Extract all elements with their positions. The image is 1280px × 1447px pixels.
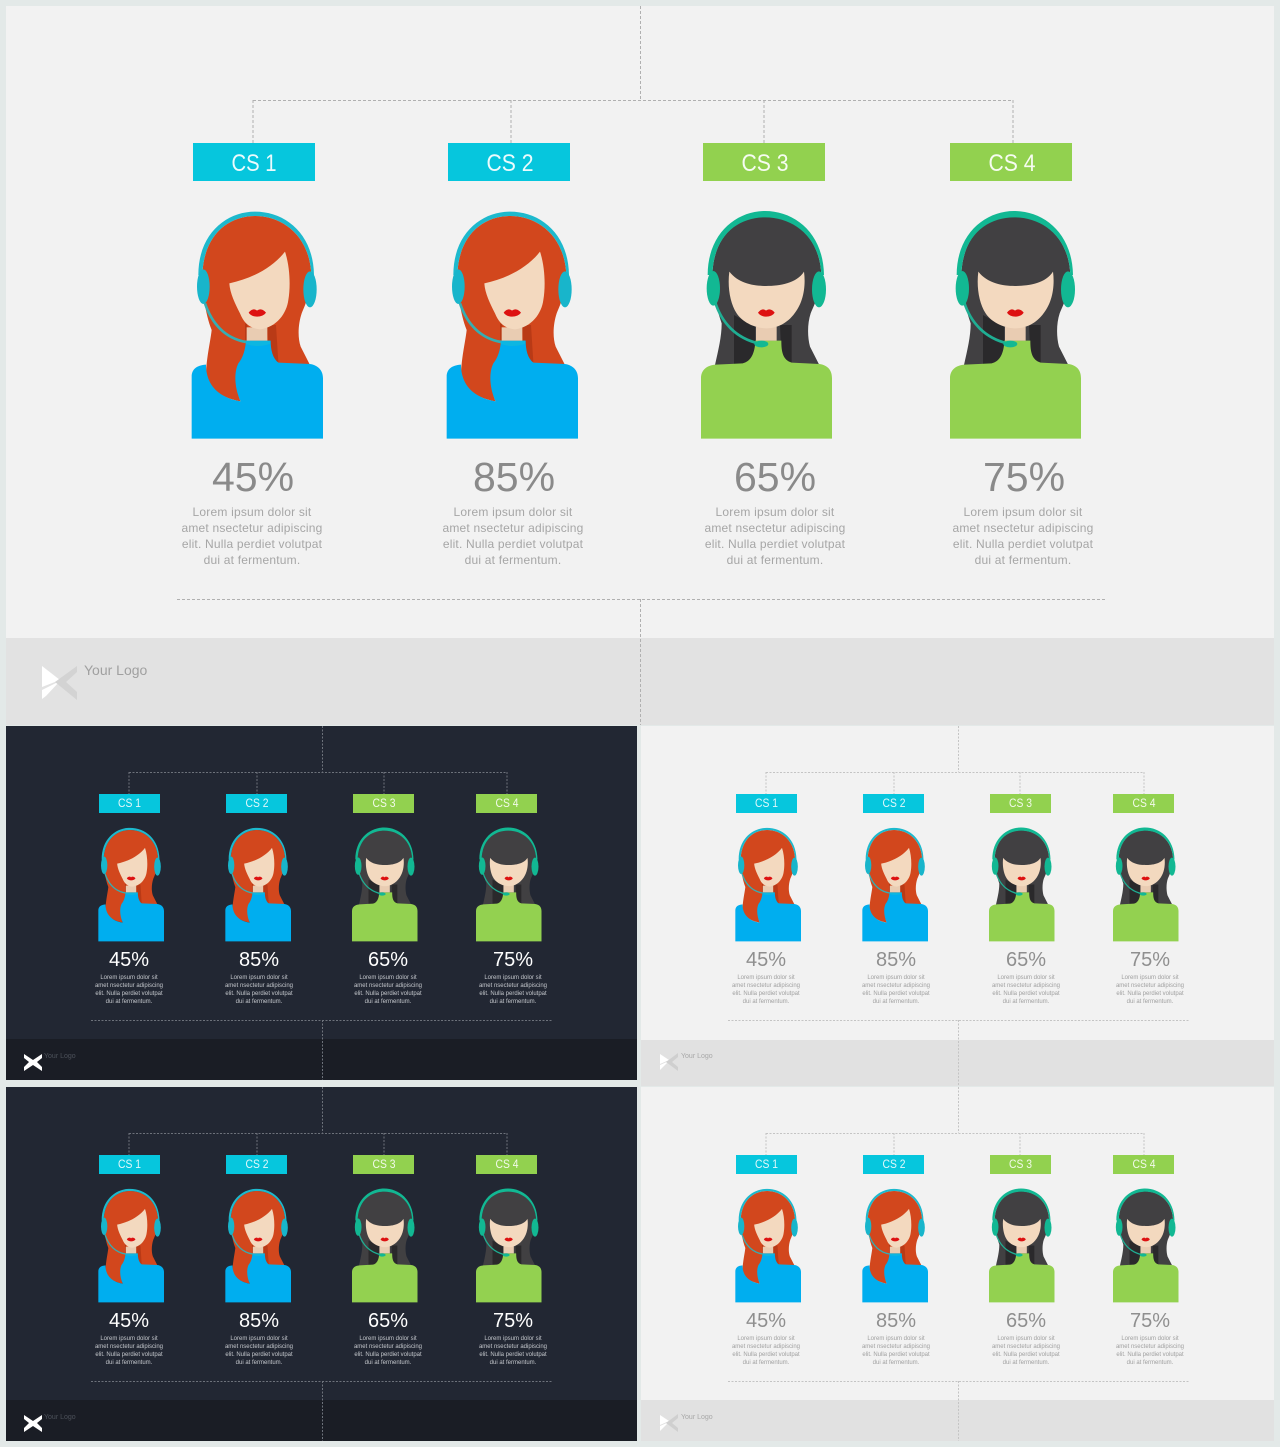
card: CS 4 [1113, 794, 1184, 1005]
card: CS 4: elit. Nulla perdiet volutpat [1116, 991, 1184, 997]
card: CS 2: amet nsectetur adipiscing [862, 1344, 930, 1350]
card: CS 2: 85% [876, 1310, 916, 1332]
card: CS 1: elit. Nulla perdiet volutpat [182, 537, 323, 551]
card: CS 2: dui at fermentum. [236, 1360, 283, 1366]
card: CS 1 [95, 1155, 164, 1366]
card: CS 2: CS 2 [882, 796, 906, 810]
card: CS 3: Lorem ipsum dolor sit [359, 975, 417, 981]
card: CS 1: amet nsectetur adipiscing [95, 983, 163, 989]
logo: Your Logo [44, 1414, 76, 1421]
card: CS 2: 85% [876, 949, 916, 971]
card: CS 1: amet nsectetur adipiscing [732, 1344, 800, 1350]
logo [24, 1414, 76, 1432]
card: CS 1: dui at fermentum. [106, 999, 153, 1005]
card: CS 2 [442, 143, 584, 567]
card: CS 1: elit. Nulla perdiet volutpat [732, 991, 800, 997]
card: CS 3: Lorem ipsum dolor sit [716, 505, 835, 519]
card: CS 4: amet nsectetur adipiscing [1116, 983, 1184, 989]
card: CS 4: amet nsectetur adipiscing [1116, 1344, 1184, 1350]
card: CS 2: amet nsectetur adipiscing [862, 983, 930, 989]
card: CS 3: Lorem ipsum dolor sit [997, 975, 1055, 981]
card: CS 4: dui at fermentum. [490, 1360, 537, 1366]
logo: your logo [42, 662, 148, 700]
card: CS 4: elit. Nulla perdiet volutpat [479, 991, 547, 997]
card: CS 2 [862, 1155, 930, 1366]
card: CS 1: Lorem ipsum dolor sit [193, 505, 312, 519]
card: CS 3: CS 3 [742, 150, 788, 177]
card: CS 3: dui at fermentum. [365, 1360, 412, 1366]
logo: your logo: Your Logo [84, 662, 148, 678]
card: CS 4: elit. Nulla perdiet volutpat [1116, 1352, 1184, 1358]
card: CS 3: elit. Nulla perdiet volutpat [705, 537, 846, 551]
card: CS 2: CS 2 [882, 1157, 906, 1171]
card: CS 1: elit. Nulla perdiet volutpat [95, 991, 163, 997]
logo [24, 1053, 76, 1071]
card: CS 1: amet nsectetur adipiscing [181, 521, 323, 535]
card: CS 2 [225, 1155, 293, 1366]
card: CS 3: elit. Nulla perdiet volutpat [354, 1352, 422, 1358]
card: CS 2: 85% [473, 454, 555, 500]
card: CS 4: CS 4 [1132, 796, 1156, 810]
card: CS 4: CS 4 [496, 1157, 519, 1171]
card: CS 4: CS 4 [1132, 1157, 1156, 1171]
card: CS 2: CS 2 [486, 150, 534, 177]
card: CS 2: 85% [239, 949, 279, 971]
card: CS 3: 65% [1006, 949, 1046, 971]
logo: Your Logo [681, 1053, 713, 1060]
card: CS 1 [732, 794, 801, 1005]
card: CS 3: amet nsectetur adipiscing [992, 983, 1060, 989]
card: CS 4: 75% [493, 949, 533, 971]
card: CS 4: Lorem ipsum dolor sit [964, 505, 1083, 519]
card: CS 3: 65% [368, 1310, 408, 1332]
card: CS 1: 45% [109, 1310, 149, 1332]
card: CS 2 [225, 794, 293, 1005]
card: CS 3: dui at fermentum. [1003, 999, 1050, 1005]
card: CS 4 [950, 143, 1094, 567]
card: CS 1 [181, 143, 323, 567]
card: CS 4: Lorem ipsum dolor sit [1121, 1336, 1179, 1342]
card: CS 2: Lorem ipsum dolor sit [867, 1336, 925, 1342]
logo [660, 1053, 713, 1071]
card: CS 4: CS 4 [988, 150, 1036, 177]
panel: dark thumbnail top [6, 726, 637, 1080]
card: CS 2: amet nsectetur adipiscing [225, 983, 293, 989]
card: CS 2: amet nsectetur adipiscing [225, 1344, 293, 1350]
card: CS 2: CS 2 [246, 796, 269, 810]
card: CS 1: Lorem ipsum dolor sit [737, 975, 795, 981]
card: CS 4: CS 4 [496, 796, 519, 810]
card: CS 2: Lorem ipsum dolor sit [867, 975, 925, 981]
panel: dark thumbnail bottom [6, 1087, 637, 1441]
card: CS 3: CS 3 [1009, 796, 1032, 810]
card: CS 3: dui at fermentum. [1003, 1360, 1050, 1366]
card: CS 3 [352, 1155, 422, 1366]
card: CS 4 [476, 794, 547, 1005]
card: CS 3: CS 3 [372, 796, 396, 810]
card: CS 4 [476, 1155, 547, 1366]
card: CS 1: CS 1 [118, 796, 141, 810]
card: CS 2: amet nsectetur adipiscing [442, 521, 584, 535]
logo [660, 1414, 713, 1432]
card: CS 4: dui at fermentum. [975, 553, 1071, 567]
card: CS 4: amet nsectetur adipiscing [479, 983, 547, 989]
card: CS 3 [352, 794, 422, 1005]
card: CS 3: Lorem ipsum dolor sit [359, 1336, 417, 1342]
card: CS 1: 45% [746, 949, 786, 971]
card: CS 2: 85% [239, 1310, 279, 1332]
card: CS 2: CS 2 [246, 1157, 269, 1171]
card: CS 3: CS 3 [372, 1157, 396, 1171]
card: CS 3 [701, 143, 846, 567]
card: CS 3 [989, 1155, 1060, 1366]
card: CS 3: amet nsectetur adipiscing [354, 1344, 422, 1350]
card: CS 2: elit. Nulla perdiet volutpat [443, 537, 584, 551]
card: CS 4: Lorem ipsum dolor sit [484, 975, 542, 981]
card: CS 3: amet nsectetur adipiscing [992, 1344, 1060, 1350]
card: CS 4: Lorem ipsum dolor sit [484, 1336, 542, 1342]
card: CS 4: amet nsectetur adipiscing [952, 521, 1094, 535]
card: CS 1: elit. Nulla perdiet volutpat [732, 1352, 800, 1358]
card: CS 4: 75% [983, 454, 1065, 500]
card: CS 3 [989, 794, 1060, 1005]
card: CS 3: elit. Nulla perdiet volutpat [992, 991, 1060, 997]
card: CS 2: elit. Nulla perdiet volutpat [862, 991, 930, 997]
card: CS 1: dui at fermentum. [106, 1360, 153, 1366]
card: CS 1: Lorem ipsum dolor sit [100, 1336, 158, 1342]
card: CS 4: dui at fermentum. [1127, 999, 1174, 1005]
card: CS 3: amet nsectetur adipiscing [354, 983, 422, 989]
card: CS 2: dui at fermentum. [873, 999, 920, 1005]
card: CS 2: elit. Nulla perdiet volutpat [225, 1352, 293, 1358]
card: CS 1: 45% [212, 454, 294, 500]
card: CS 1 [732, 1155, 801, 1366]
card: CS 2: Lorem ipsum dolor sit [454, 505, 573, 519]
card: CS 2 [862, 794, 930, 1005]
card: CS 3: amet nsectetur adipiscing [704, 521, 846, 535]
card: CS 4: Lorem ipsum dolor sit [1121, 975, 1179, 981]
logo: Your Logo [681, 1414, 713, 1421]
panel: main light slide [6, 6, 1274, 725]
card: CS 4 [1113, 1155, 1184, 1366]
card: CS 1: dui at fermentum. [743, 999, 790, 1005]
card: CS 4: elit. Nulla perdiet volutpat [479, 1352, 547, 1358]
card: CS 3: 65% [1006, 1310, 1046, 1332]
card: CS 2: Lorem ipsum dolor sit [230, 1336, 288, 1342]
card: CS 3: dui at fermentum. [727, 553, 823, 567]
card: CS 4: dui at fermentum. [490, 999, 537, 1005]
card: CS 1: CS 1 [118, 1157, 141, 1171]
card: CS 2: dui at fermentum. [873, 1360, 920, 1366]
card: CS 4: 75% [493, 1310, 533, 1332]
card: CS 3: 65% [734, 454, 816, 500]
card: CS 1: CS 1 [755, 796, 778, 810]
card: CS 2: elit. Nulla perdiet volutpat [862, 1352, 930, 1358]
card: CS 1: 45% [109, 949, 149, 971]
card: CS 4: 75% [1130, 949, 1170, 971]
card: CS 1: CS 1 [755, 1157, 778, 1171]
logo: Your Logo [44, 1053, 76, 1060]
card: CS 1: Lorem ipsum dolor sit [737, 1336, 795, 1342]
card: CS 2: dui at fermentum. [465, 553, 561, 567]
card: CS 4: elit. Nulla perdiet volutpat [953, 537, 1094, 551]
card: CS 3: 65% [368, 949, 408, 971]
card: CS 4: dui at fermentum. [1127, 1360, 1174, 1366]
card: CS 4: 75% [1130, 1310, 1170, 1332]
panel: light thumbnail bottom [641, 1087, 1274, 1441]
card: CS 1: CS 1 [232, 150, 276, 177]
card: CS 4: amet nsectetur adipiscing [479, 1344, 547, 1350]
card: CS 1: amet nsectetur adipiscing [732, 983, 800, 989]
card: CS 2: elit. Nulla perdiet volutpat [225, 991, 293, 997]
card: CS 1: 45% [746, 1310, 786, 1332]
card: CS 3: dui at fermentum. [365, 999, 412, 1005]
card: CS 3: CS 3 [1009, 1157, 1032, 1171]
card: CS 3: elit. Nulla perdiet volutpat [992, 1352, 1060, 1358]
card: CS 1: dui at fermentum. [743, 1360, 790, 1366]
card: CS 1: amet nsectetur adipiscing [95, 1344, 163, 1350]
card: CS 2: Lorem ipsum dolor sit [230, 975, 288, 981]
card: CS 3: Lorem ipsum dolor sit [997, 1336, 1055, 1342]
card: CS 1: elit. Nulla perdiet volutpat [95, 1352, 163, 1358]
panel: light thumbnail top [641, 726, 1274, 1086]
card: CS 1 [95, 794, 164, 1005]
card: CS 2: dui at fermentum. [236, 999, 283, 1005]
card: CS 1: dui at fermentum. [204, 553, 300, 567]
card: CS 3: elit. Nulla perdiet volutpat [354, 991, 422, 997]
card: CS 1: Lorem ipsum dolor sit [100, 975, 158, 981]
